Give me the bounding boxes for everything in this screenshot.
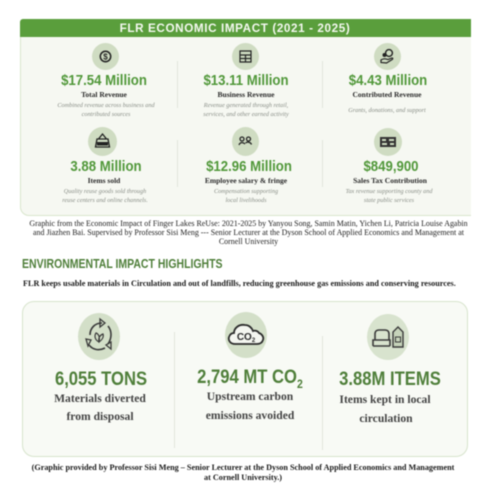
- metric: CO2 avoided: [196, 367, 304, 422]
- metric: tons diverted: [54, 369, 148, 424]
- icon: CO2 cloud: 2: [252, 338, 256, 344]
- metric: items sold: Items sold: [88, 176, 120, 185]
- metric: items kept: 3.88M ITEMS: [339, 369, 441, 390]
- heading banner: [20, 19, 471, 36]
- metric: total revenue: contributed sources: [82, 111, 130, 118]
- panel: economic impact: [20, 19, 471, 216]
- panel: environmental impact: [22, 301, 468, 457]
- metric: total revenue: $17.54 Million: [61, 72, 146, 89]
- metric: business revenue: Revenue generated through retail,: [204, 102, 288, 109]
- caption: [29, 219, 468, 247]
- metric: total revenue: [57, 72, 155, 118]
- footer credit: [31, 463, 455, 483]
- metric: employee salary: Compensation supporting: [214, 188, 278, 195]
- icon: sale bag: [88, 127, 117, 156]
- icon: CO2 cloud: [225, 312, 267, 358]
- caption: Cornell University: [219, 237, 278, 246]
- metric: sales tax: Sales Tax Contribution: [353, 176, 427, 185]
- icon: recycling leaf: [78, 313, 120, 360]
- metric: business revenue: Business Revenue: [218, 90, 274, 99]
- metric: CO2 avoided: emissions avoided: [206, 409, 294, 422]
- metric: contributed revenue: Grants, donations, and support: [348, 107, 426, 114]
- metric: tons diverted: from disposal: [66, 410, 134, 423]
- metric: tons diverted: 6,055 TONS: [55, 369, 147, 390]
- metric: items sold: reuse centers and online channels.: [62, 197, 148, 204]
- metric: total revenue: Combined revenue across business and: [57, 102, 155, 109]
- footer credit: at Cornell University.): [204, 473, 282, 482]
- metric: CO2 avoided: Upstream carbon: [207, 390, 293, 403]
- metric: contributed revenue: [348, 72, 428, 114]
- metric: tons diverted: Materials diverted: [54, 392, 146, 405]
- caption: and Jiazhen Bai. Supervised by Professor Sisi Meng --- Senior Lecturer at the Dyson School of Applied Economics and Management at: [33, 228, 464, 237]
- icon: dollar coin: [92, 43, 119, 70]
- metric: sales tax: $849,900: [363, 158, 419, 175]
- metric: total revenue: Total Revenue: [81, 90, 127, 99]
- metric: sales tax: state public services: [364, 197, 414, 204]
- metric: items kept: circulation: [359, 412, 413, 425]
- metric: business revenue: [203, 72, 290, 118]
- metric: sales tax: [346, 158, 433, 204]
- icon: dollar coin: $: [103, 52, 108, 62]
- metric: contributed revenue: Contributed Revenue: [353, 90, 421, 99]
- heading banner: FLR ECONOMIC IMPACT (2021 - 2025): [120, 22, 350, 34]
- metric: items sold: 3.88 Million: [70, 158, 142, 175]
- icon: tax receipt: [374, 128, 402, 156]
- metric: items kept: [339, 369, 441, 425]
- metric: employee salary: local livelihoods: [225, 197, 267, 204]
- metric: items sold: Quality reuse goods sold through: [64, 188, 146, 195]
- metric: employee salary: Employee salary & fringe: [205, 176, 287, 185]
- metric: business revenue: services, and other earned activity: [203, 111, 289, 118]
- metric: sales tax: Tax revenue supporting county and: [346, 188, 432, 195]
- icon: furniture and bottle: [367, 314, 409, 360]
- metric: business revenue: $13.11 Million: [203, 72, 289, 89]
- metric: items sold: [62, 158, 148, 204]
- metric: employee salary: $12.96 Million: [206, 158, 292, 175]
- heading: environmental impact: ENVIRONMENTAL IMPACT HIGHLIGHTS: [22, 256, 223, 271]
- metric: CO2 avoided: 2,794 MT CO2: [197, 367, 303, 391]
- metric: items kept: Items kept in local: [339, 393, 431, 406]
- metric: employee salary: [204, 158, 292, 204]
- icon: hand with coins: [374, 43, 401, 70]
- icon: storefront: [232, 43, 259, 70]
- icon: employees: [232, 127, 259, 156]
- metric: contributed revenue: $4.43 Million: [349, 72, 427, 89]
- caption: Graphic from the Economic Impact of Finger Lakes ReUse: 2021-2025 by Yanyou Song, Samin Matin, Yichen Li, Patricia Louise Agabin: [29, 219, 468, 228]
- intro text: FLR keeps usable materials in Circulation and out of landfills, reducing greenhouse gas emissions and conserving resources.: [23, 279, 456, 288]
- footer credit: (Graphic provided by Professor Sisi Meng – Senior Lecturer at the Dyson School of Applied Economics and Management: [32, 463, 454, 472]
- icon: CO2 cloud: CO: [237, 332, 252, 343]
